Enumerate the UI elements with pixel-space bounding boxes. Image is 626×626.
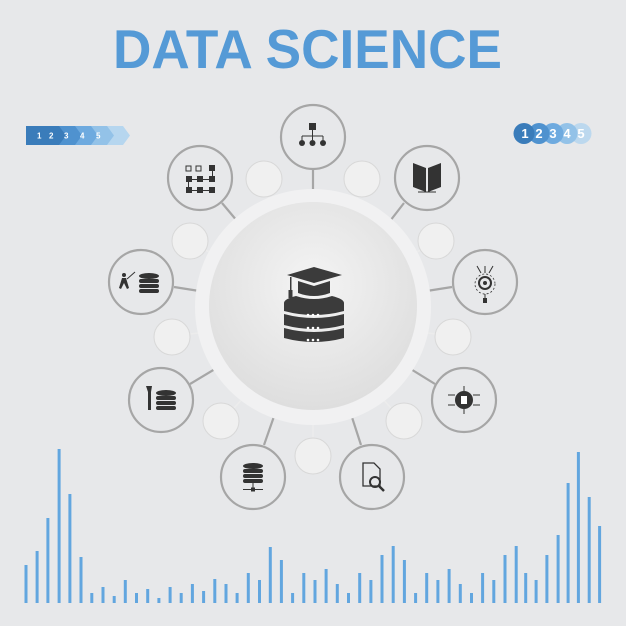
connectors <box>174 170 452 445</box>
icon: brain book <box>413 163 441 192</box>
step arrows <box>26 126 130 145</box>
step circles: 1 <box>521 126 529 141</box>
step arrows: 4 <box>80 132 85 140</box>
outer ring <box>195 189 431 425</box>
small circles <box>154 161 471 474</box>
icon: flowchart <box>186 165 215 193</box>
step circles <box>514 123 592 144</box>
icon: document search <box>363 463 384 491</box>
step circles: 4 <box>563 126 571 141</box>
bar chart <box>24 449 601 603</box>
icon: gear network <box>475 266 495 303</box>
step circles: 2 <box>535 126 543 141</box>
step arrows: 3 <box>64 132 69 140</box>
icon: chip <box>448 386 480 414</box>
icon: miner database <box>119 272 159 293</box>
icon: wrench database <box>146 386 176 410</box>
step circles: 3 <box>549 126 557 141</box>
icon circles <box>109 105 517 509</box>
icon: network database <box>243 463 263 492</box>
step arrows: 1 <box>37 132 42 140</box>
step circles: 5 <box>577 126 585 141</box>
title: DATA SCIENCE <box>113 18 502 80</box>
icon: hierarchy <box>299 123 326 146</box>
step arrows: 2 <box>49 132 54 140</box>
icon: graduation database <box>284 267 344 342</box>
step arrows: 5 <box>96 132 101 140</box>
